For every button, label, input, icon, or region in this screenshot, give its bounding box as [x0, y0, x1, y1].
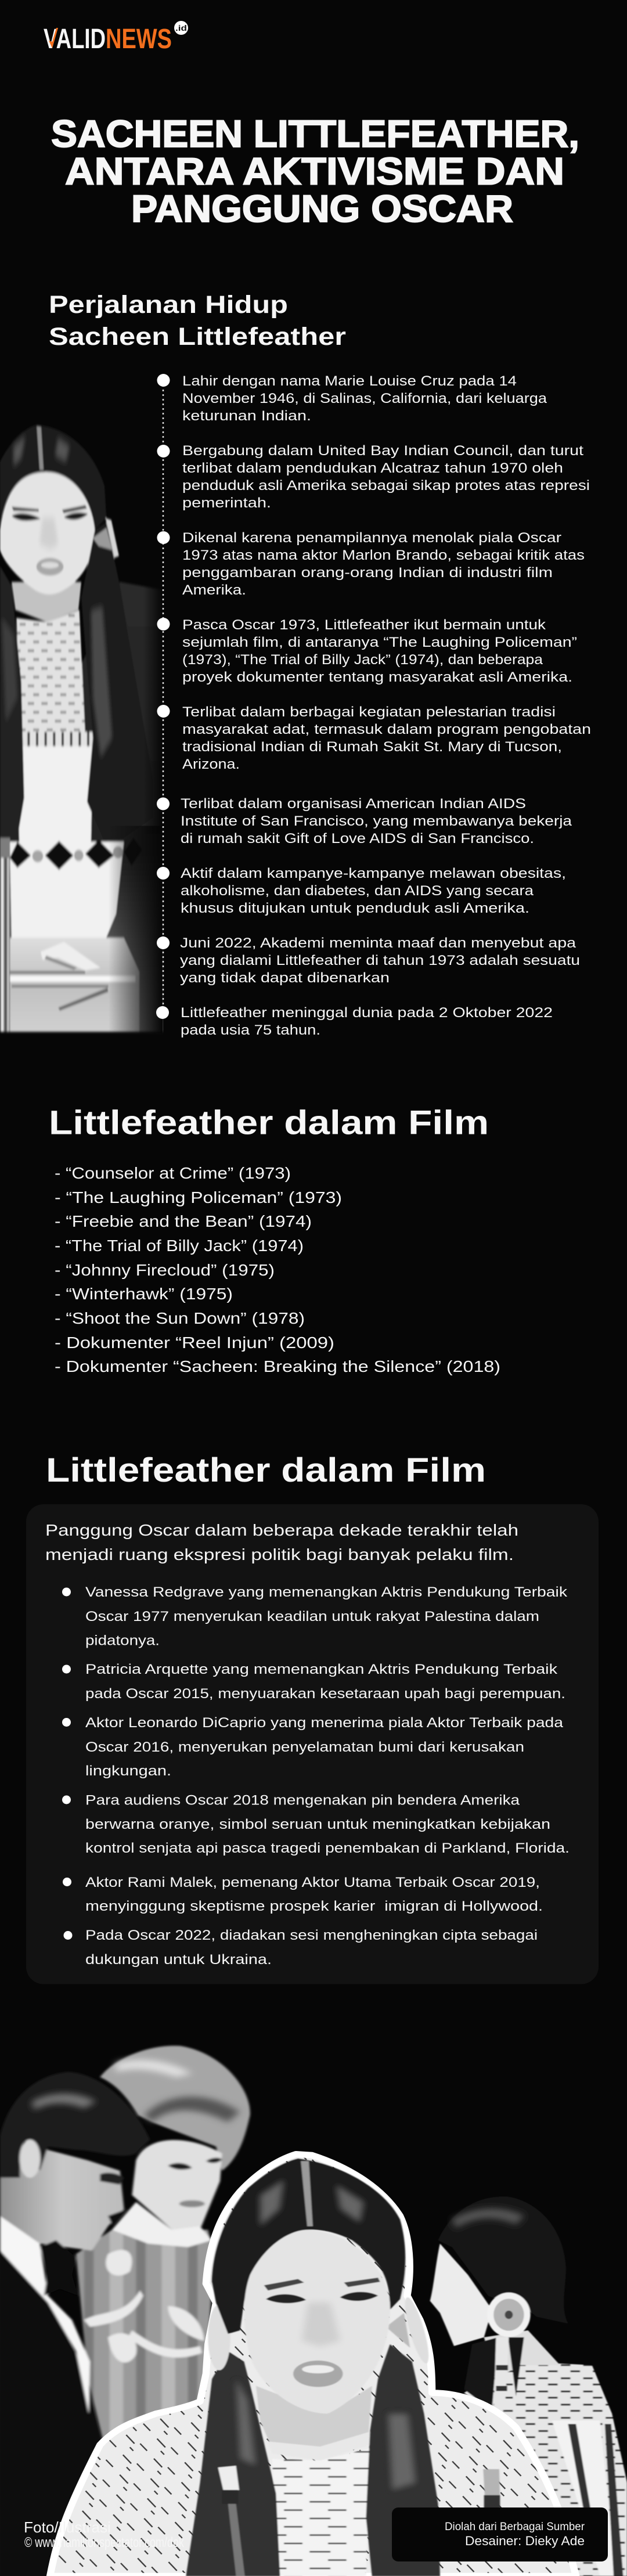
timeline text 6 — [181, 796, 572, 846]
heading: Perjalanan Hidup — [49, 291, 346, 351]
panel background — [26, 1504, 599, 1984]
bullet 6: dukungan untuk Ukraina. — [85, 1952, 272, 1968]
timeline text 3: 1973 atas nama aktor Marlon Brando, sebagai kritik atas — [182, 547, 585, 563]
timeline — [156, 373, 591, 1038]
bullet 1: pidatonya. — [85, 1633, 160, 1649]
credit box: Diolah dari Berbagai Sumber — [445, 2521, 585, 2533]
logo: Validnews.id — [44, 21, 188, 55]
timeline text 5: Arizona. — [182, 756, 240, 772]
film list: - Dokumenter “Sacheen: Breaking the Silence” (2018) — [55, 1357, 500, 1375]
timeline text 8: Juni 2022, Akademi meminta maaf dan menyebut apa — [180, 935, 576, 951]
logo: Validnews.id: NEWS — [106, 24, 172, 55]
timeline text 2: penduduk asli Amerika sebagai sikap protes atas represi — [182, 478, 590, 493]
bullet 1: Vanessa Redgrave yang memenangkan Aktris Pendukung Terbaik — [85, 1584, 568, 1600]
title: ANTARA AKTIVISME DAN — [65, 150, 564, 193]
title: SACHEEN LITTLEFEATHER, — [51, 112, 579, 155]
person: man in tuxedo and woman behind — [0, 2046, 250, 2576]
heading: Littlefeather dalam Film: Littlefeather dalam Film — [49, 1104, 489, 1141]
bullet 4: berwarna oranye, simbol seruan untuk meningkatkan kebijakan — [85, 1817, 550, 1832]
timeline text 4: proyek dokumenter tentang masyarakat asli Amerika. — [182, 669, 572, 685]
photo credit: © www.hamiltonspectator.com/dok — [24, 2535, 185, 2550]
timeline dots — [156, 374, 170, 1019]
timeline text 1: Lahir dengan nama Marie Louise Cruz pada 14 — [182, 373, 517, 389]
bullet 2 — [62, 1662, 565, 1702]
timeline text 3 — [182, 530, 585, 598]
timeline text 2 — [182, 443, 590, 511]
person: woman in profile — [430, 2197, 627, 2576]
timeline text 9 — [181, 1005, 553, 1038]
heading: Perjalanan Hidup: Perjalanan Hidup — [49, 291, 288, 319]
panel: Oscar political expression — [26, 1504, 599, 1984]
intro text — [45, 1521, 518, 1563]
film list: - “Counselor at Crime” (1973) — [55, 1164, 291, 1182]
bullet 3: lingkungan. — [85, 1763, 171, 1779]
photo credit — [24, 2519, 185, 2550]
timeline text 6: Institute of San Francisco, yang membawanya bekerja — [181, 813, 572, 829]
bullet 1 — [62, 1584, 568, 1649]
timeline text 3: penggambaran orang-orang Indian di industri film — [182, 565, 553, 581]
bullet 1: Oscar 1977 menyerukan keadilan untuk rakyat Palestina dalam — [85, 1609, 539, 1624]
timeline text 4 — [182, 617, 577, 685]
photo credit: Foto/Ilustrasi — [24, 2519, 111, 2536]
timeline text 8: yang dialami Littlefeather di tahun 1973 adalah sesuatu — [180, 953, 580, 968]
intro text: Panggung Oscar dalam beberapa dekade terakhir telah — [45, 1521, 518, 1539]
timeline text 2: Bergabung dalam United Bay Indian Council, dan turut — [182, 443, 583, 459]
credit box — [392, 2507, 608, 2561]
timeline text 8: yang tidak dapat dibenarkan — [180, 970, 390, 986]
film list: - “Freebie and the Bean” (1974) — [55, 1212, 312, 1230]
bullet 6 — [64, 1928, 538, 1968]
timeline text 4: (1973), “The Trial of Billy Jack” (1974), dan beberapa — [182, 652, 543, 668]
timeline text 1: keturunan Indian. — [182, 408, 311, 424]
film list: - “The Trial of Billy Jack” (1974) — [55, 1237, 304, 1255]
bullet 2: pada Oscar 2015, menyuarakan kesetaraan upah bagi perempuan. — [85, 1686, 565, 1702]
logo: Validnews.id: .id — [175, 23, 187, 33]
heading: Littlefeather dalam Film (Oscar section): Littlefeather dalam Film — [46, 1451, 486, 1489]
bullet 3 — [62, 1715, 563, 1779]
timeline text 4: Pasca Oscar 1973, Littlefeather ikut bermain untuk — [182, 617, 546, 633]
film list: - “Johnny Firecloud” (1975) — [55, 1261, 275, 1279]
timeline text 2: pemerintah. — [182, 495, 271, 511]
credit box: Desainer: Dieky Ade — [465, 2534, 585, 2548]
timeline text 6: di rumah sakit Gift of Love AIDS di San Francisco. — [181, 831, 534, 846]
heading: Perjalanan Hidup: Sacheen Littlefeather — [49, 323, 346, 351]
bullet 4 — [62, 1793, 570, 1856]
film list: - Dokumenter “Reel Injun” (2009) — [55, 1334, 334, 1352]
intro text: menjadi ruang ekspresi politik bagi banyak pelaku film. — [45, 1545, 514, 1563]
timeline text 8 — [180, 935, 580, 986]
title: PANGGUNG OSCAR — [131, 187, 513, 230]
timeline text 9: Littlefeather meninggal dunia pada 2 Oktober 2022 — [181, 1005, 553, 1021]
timeline text 7: khusus ditujukan untuk penduduk asli Amerika. — [181, 900, 529, 916]
person: Sacheen Littlefeather with white outline — [50, 2154, 576, 2576]
timeline text 7: Aktif dalam kampanye-kampanye melawan obesitas, — [181, 866, 566, 881]
timeline text 3: Amerika. — [182, 582, 246, 598]
bullet 4: kontrol senjata api pasca tragedi penembakan di Parkland, Florida. — [85, 1840, 570, 1856]
bullet 5 — [63, 1875, 543, 1914]
title — [51, 112, 579, 230]
timeline dotted line — [163, 380, 164, 1013]
bullet 2: Patricia Arquette yang memenangkan Aktris Pendukung Terbaik — [85, 1662, 558, 1677]
timeline text 6: Terlibat dalam organisasi American Indian AIDS — [181, 796, 526, 812]
bullet 5: Aktor Rami Malek, pemenang Aktor Utama Terbaik Oscar 2019, — [85, 1875, 540, 1890]
timeline text 4: sejumlah film, di antaranya “The Laughing Policeman” — [182, 635, 577, 650]
timeline text 9: pada usia 75 tahun. — [181, 1022, 320, 1038]
bullet 4: Para audiens Oscar 2018 mengenakan pin bendera Amerika — [85, 1793, 520, 1808]
film list: - “Winterhawk” (1975) — [55, 1285, 233, 1303]
timeline text 7 — [181, 866, 566, 916]
bullet 3: Aktor Leonardo DiCaprio yang menerima piala Aktor Terbaik pada — [85, 1715, 563, 1731]
photo collage: Oscar 1973 — [0, 2046, 627, 2576]
timeline text 3: Dikenal karena penampilannya menolak piala Oscar — [182, 530, 561, 546]
bullet 5: menyinggung skeptisme prospek karier imigran di Hollywood. — [85, 1898, 543, 1914]
timeline text 7: alkoholisme, dan diabetes, dan AIDS yang secara — [181, 883, 534, 899]
timeline text 5: masyarakat adat, termasuk dalam program pengobatan — [182, 722, 591, 737]
timeline text 1: November 1946, di Salinas, California, dari keluarga — [182, 391, 547, 406]
timeline text 5: Terlibat dalam berbagai kegiatan pelestarian tradisi — [182, 704, 556, 720]
timeline text 5 — [182, 704, 591, 772]
photo: Sacheen Littlefeather at the podium — [0, 425, 163, 1034]
timeline text 1 — [182, 373, 547, 424]
bullet 6: Pada Oscar 2022, diadakan sesi mengheningkan cipta sebagai — [85, 1928, 538, 1943]
timeline text 5: tradisional Indian di Rumah Sakit St. Mary di Tucson, — [182, 739, 562, 755]
film list: - “Shoot the Sun Down” (1978) — [55, 1309, 305, 1327]
timeline text 2: terlibat dalam pendudukan Alcatraz tahun 1970 oleh — [182, 460, 563, 476]
bullet 3: Oscar 2016, menyerukan penyelamatan bumi dari kerusakan — [85, 1739, 524, 1755]
film list — [55, 1164, 500, 1375]
logo: Validnews.id: VALID — [44, 24, 106, 55]
film list: - “The Laughing Policeman” (1973) — [55, 1188, 342, 1206]
